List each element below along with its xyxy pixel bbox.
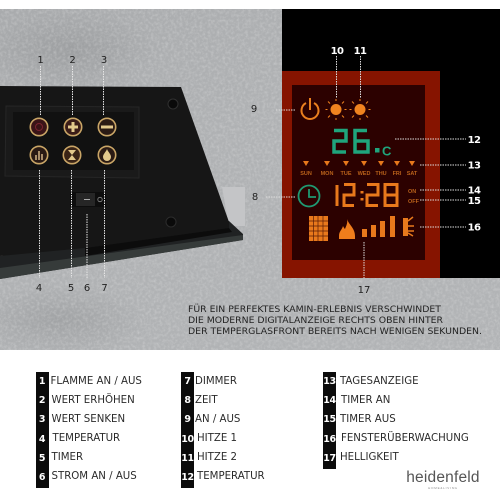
legend labels 7-12: ZEIT (195, 395, 218, 406)
black display backdrop (282, 9, 500, 278)
weekday labels: MON (321, 171, 333, 177)
callout numbers right: 14 (468, 186, 481, 196)
number bar 1-6: 4 (39, 434, 45, 445)
callout numbers right (331, 46, 481, 234)
time readout (337, 184, 397, 206)
button panel (5, 106, 139, 178)
legend labels 13-17: TIMER AUS (340, 414, 396, 425)
icon: window monitor (403, 217, 414, 236)
screw bottom (166, 217, 176, 227)
weekday labels: SAT (407, 171, 418, 177)
weekday labels: SUN (300, 171, 312, 177)
callout numbers left: 5 (68, 283, 74, 294)
number bar 7-12: 11 (181, 453, 194, 464)
number bar 1-6: 5 (39, 453, 45, 464)
pale wall plate behind device (222, 187, 245, 226)
number bar 7-12: 12 (181, 472, 194, 483)
icon: power (302, 98, 318, 119)
outside callouts (251, 104, 370, 296)
main picture: fireplace control and display (0, 9, 500, 350)
weekday labels: TUE (340, 171, 352, 177)
legend labels 1-6: FLAMME AN / AUS (50, 376, 142, 387)
device body (0, 86, 232, 256)
legend labels 1-6: STROM AN / AUS (52, 471, 137, 482)
number bar 13-17: 14 (323, 395, 336, 406)
callout numbers right: 16 (468, 222, 481, 234)
legend labels 7-12: DIMMER (195, 376, 237, 387)
icon: clock (298, 186, 320, 206)
callout numbers left: 3 (101, 55, 107, 66)
number bar 1-6 (36, 372, 48, 488)
number bar 7-12: 10 (181, 434, 194, 445)
description: DIE MODERNE DIGITALANZEIGE RECHTS OBEN HINTER (188, 316, 443, 326)
legend labels 1-6: TIMER (52, 452, 83, 463)
icon: window grid (309, 216, 328, 241)
callout numbers right: 13 (468, 160, 481, 172)
weekday labels (300, 171, 418, 177)
outside callouts: 9 (251, 104, 257, 115)
legend column 3 (323, 372, 469, 469)
callout numbers left: 7 (101, 283, 108, 294)
logo: heidenfeld: HOME&LIVING (428, 486, 458, 490)
legend labels 7-12: AN / AUS (195, 414, 240, 425)
number bar 13-17: 16 (323, 434, 336, 445)
button 6: flame (98, 146, 116, 164)
number bar 13-17: 15 (323, 414, 336, 425)
button 2: plus (64, 118, 82, 136)
legend labels 13-17: HELLIGKEIT (340, 452, 399, 463)
weekday labels: THU (375, 171, 387, 177)
legend labels 1-6: WERT SENKEN (52, 414, 125, 425)
callout numbers left: 2 (69, 55, 76, 66)
on off labels (408, 189, 420, 205)
weekday labels: WED (358, 171, 370, 177)
legend labels 1-6: TEMPERATUR (52, 433, 120, 444)
callout numbers right: 10 (331, 46, 344, 57)
number bar 13-17 (323, 372, 336, 469)
legend column 1 (36, 372, 142, 488)
description: FÜR EIN PERFEKTES KAMIN-ERLEBNIS VERSCHWINDET (188, 304, 442, 315)
callout numbers left: 6 (84, 283, 90, 294)
glass front strip (0, 221, 243, 279)
legend labels 1-6 (50, 376, 142, 482)
rocker power switch (70, 192, 106, 207)
screw top (168, 99, 178, 109)
number bar 1-6: 1 (39, 376, 45, 387)
button 1: flame on/off (30, 118, 48, 136)
leader lines right (266, 56, 466, 278)
number bar 7-12: 9 (184, 414, 191, 425)
button 3: minus (98, 118, 116, 136)
number bar 7-12: 7 (184, 376, 191, 387)
number bar 1-6: 6 (39, 472, 45, 483)
temperature readout (334, 130, 380, 152)
number bar 1-6: 3 (39, 414, 45, 425)
legend labels 13-17: TAGESANZEIGE (340, 376, 419, 387)
button 4: temperature (30, 146, 48, 164)
callout numbers right: 15 (468, 196, 481, 207)
callout numbers left (36, 55, 108, 294)
callout numbers right: 11 (354, 46, 367, 57)
icon: flame (339, 219, 355, 239)
number bar 7-12 (181, 372, 194, 488)
description (188, 304, 482, 337)
legend labels 13-17: TIMER AN (341, 395, 390, 406)
number bar 7-12: 8 (184, 395, 191, 406)
on off labels: OFF (408, 199, 420, 205)
legend column 2 (181, 372, 265, 488)
outside callouts: 8 (252, 192, 258, 203)
icon: sun 1 (326, 99, 346, 120)
concrete background (0, 9, 500, 355)
brightness bars (362, 216, 395, 237)
outside callouts: 17 (358, 285, 370, 296)
legend labels 7-12: HITZE 2 (197, 452, 237, 463)
weekday labels: FRI (393, 171, 402, 177)
legend labels 13-17: FENSTERÜBERWACHUNG (341, 433, 469, 444)
logo: heidenfeld: heidenfeld (406, 469, 480, 486)
on off labels: ON (408, 189, 416, 195)
legend labels 7-12 (195, 376, 265, 482)
legend labels 7-12: HITZE 1 (197, 433, 237, 444)
number bar 1-6: 2 (39, 395, 45, 406)
weekday markers (303, 161, 415, 166)
button 5: timer (63, 146, 81, 164)
legend labels 13-17 (340, 376, 469, 463)
legend labels 7-12: TEMPERATUR (197, 471, 265, 482)
description: DER TEMPERGLASFRONT BEREITS NACH WENIGEN SEKUNDEN. (188, 327, 482, 337)
icon: sun 2 (350, 99, 370, 120)
legend labels 1-6: WERT ERHÖHEN (52, 395, 135, 406)
degree unit C: C (382, 144, 392, 158)
callout numbers left: 4 (36, 283, 42, 294)
callout numbers right: 12 (468, 135, 481, 146)
leader lines left (40, 66, 104, 278)
red display panel (282, 71, 440, 278)
number bar 13-17: 13 (323, 376, 336, 387)
callout numbers left: 1 (37, 55, 44, 66)
number bar 13-17: 17 (323, 453, 336, 464)
